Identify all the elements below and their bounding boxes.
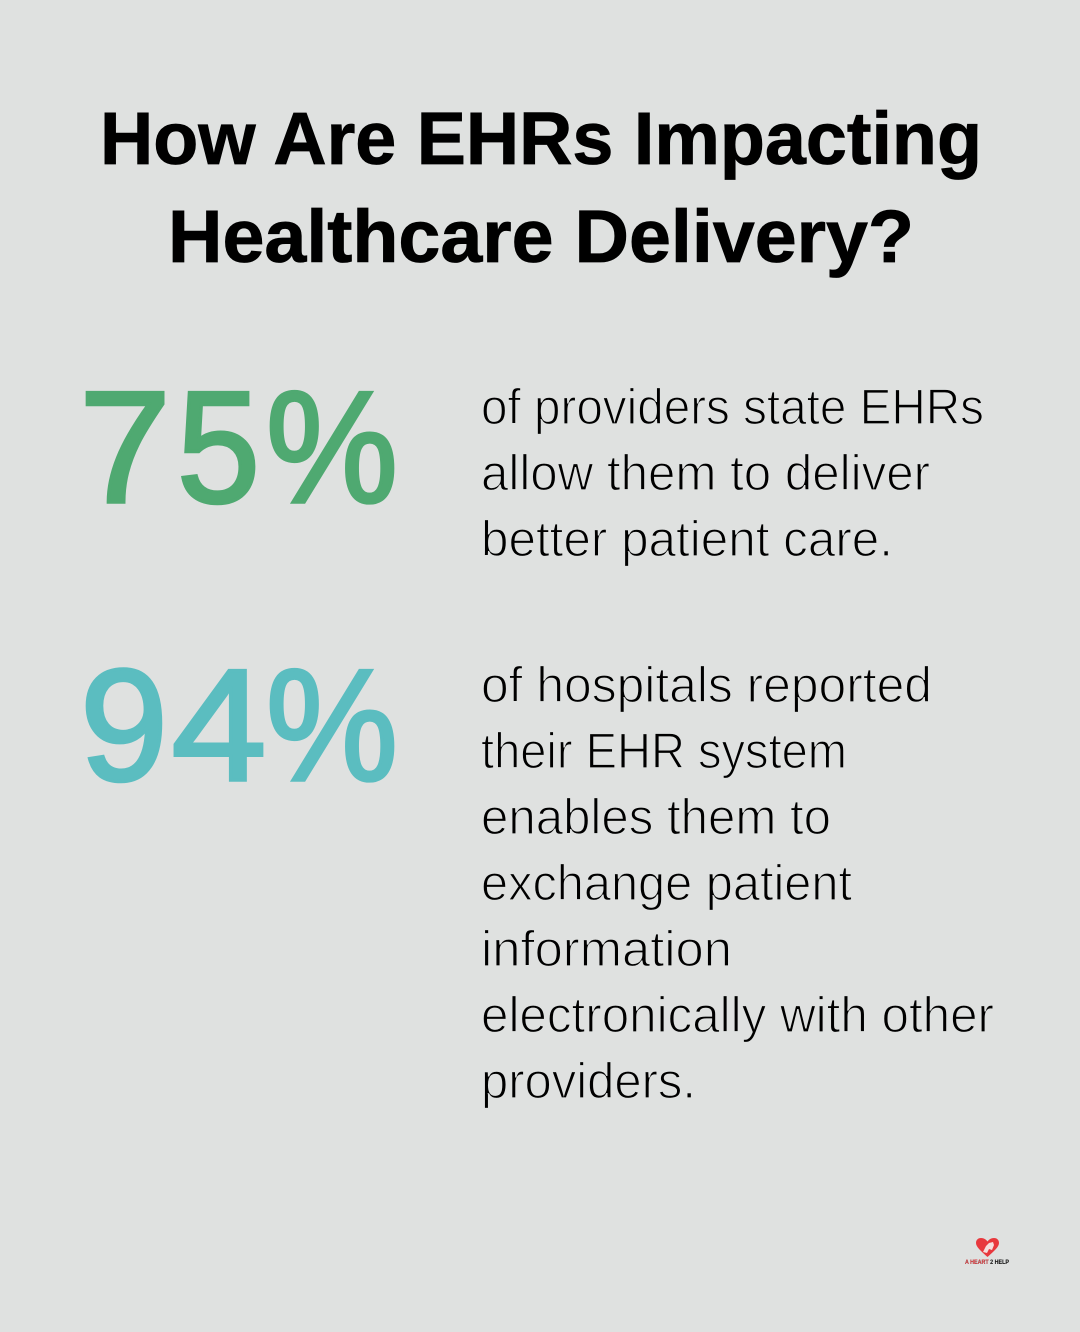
statistic: 75%: %	[266, 358, 398, 536]
text block: hospitals statement: their EHR system	[481, 723, 847, 779]
text block: providers statement: of providers state EHRs	[481, 379, 984, 435]
logo: A Heart 2 Help	[965, 1238, 1009, 1266]
text block: providers statement: better patient care.	[481, 511, 893, 567]
text block: providers statement: allow them to deliver	[481, 445, 930, 501]
text block: hospitals statement: enables them to	[481, 789, 831, 845]
statistic: 75%	[79, 358, 398, 536]
logo wordmark: A HEART 2 HELP	[965, 1259, 1009, 1266]
statistic: 75%: 5	[177, 358, 260, 536]
statistic: 94%: 9	[80, 636, 168, 814]
title: Healthcare Delivery?	[168, 195, 914, 278]
statistic: 75%: 7	[79, 358, 171, 536]
text block: providers statement	[481, 379, 984, 567]
text block: hospitals statement: of hospitals reported	[481, 657, 932, 713]
statistic: 94%	[80, 636, 398, 814]
statistic: 94%: %	[266, 636, 398, 814]
text block: hospitals statement	[481, 657, 994, 1109]
title	[100, 97, 982, 278]
text block: hospitals statement: information	[481, 921, 732, 977]
title: How Are EHRs Impacting	[100, 97, 982, 180]
icon: heart with hand	[976, 1238, 999, 1257]
statistic: 94%: 4	[172, 636, 266, 814]
text block: hospitals statement: exchange patient	[481, 855, 852, 911]
text block: hospitals statement: electronically with other	[481, 987, 994, 1043]
text block: hospitals statement: providers.	[481, 1053, 696, 1109]
